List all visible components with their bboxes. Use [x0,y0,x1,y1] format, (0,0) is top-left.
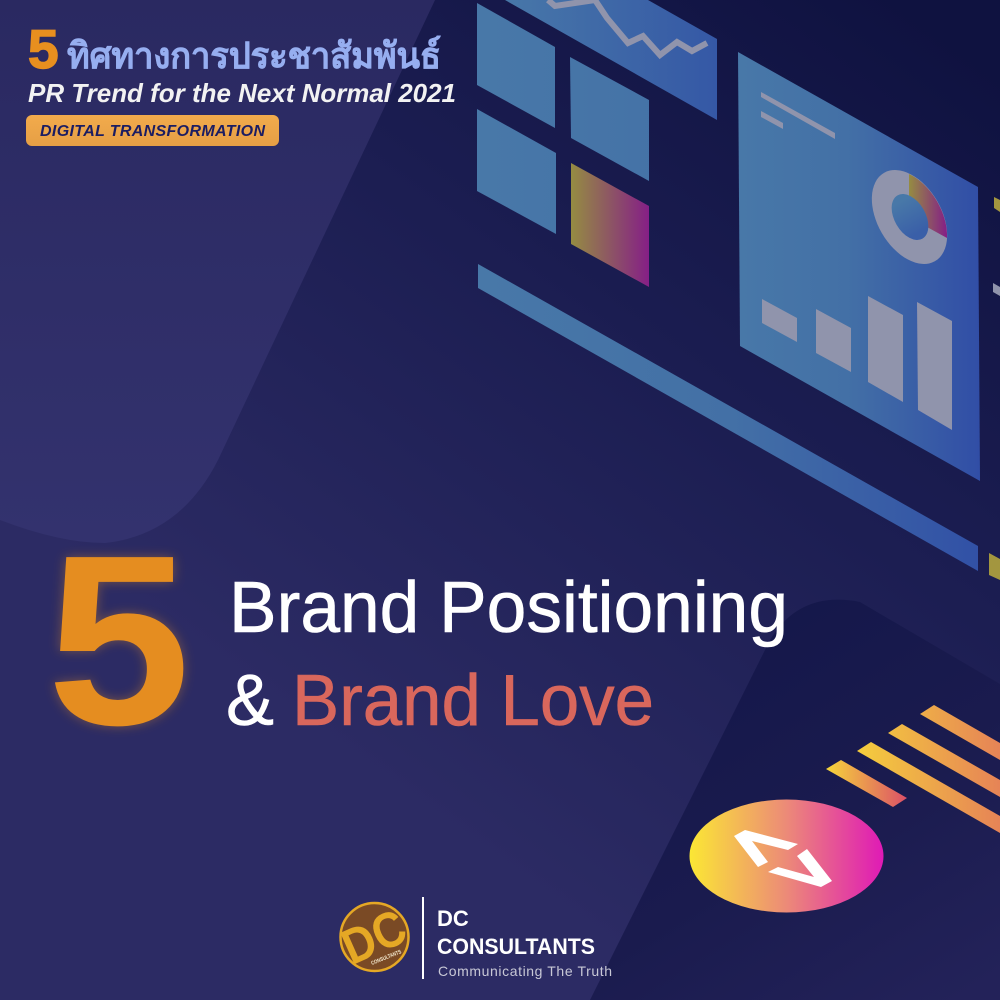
icon: gradient ellipse with code arrows [690,800,884,912]
bar chart [762,296,952,430]
tag pill [26,115,279,146]
heading: & [226,661,274,741]
company name: DC [437,906,469,931]
big number 5: 5 [47,505,190,776]
heading: Brand Positioning [229,568,788,648]
heading: Brand Love [292,661,654,741]
header [26,18,456,146]
long bar [478,264,978,571]
logo [333,897,612,979]
company name: CONSULTANTS [437,934,595,959]
donut chart [856,157,963,277]
line chart panel [505,0,717,120]
dashboard tiles [477,3,649,287]
logo badge: CONSULTANTS [371,949,403,967]
company name [437,906,612,979]
big number 5: 5 [47,505,190,776]
right edge fragments [989,197,1000,580]
subtitle: PR Trend for the Next Normal 2021 [28,78,456,108]
stripes [826,705,1000,833]
Thai title: ทิศทางการประชาสัมพันธ์ [67,35,441,76]
heading [226,568,788,741]
company name: Communicating The Truth [438,963,612,979]
tag pill: DIGITAL TRANSFORMATION [40,123,265,140]
chart panel [738,52,980,481]
header number: 5 [28,18,59,80]
logo badge: DC [333,898,415,976]
